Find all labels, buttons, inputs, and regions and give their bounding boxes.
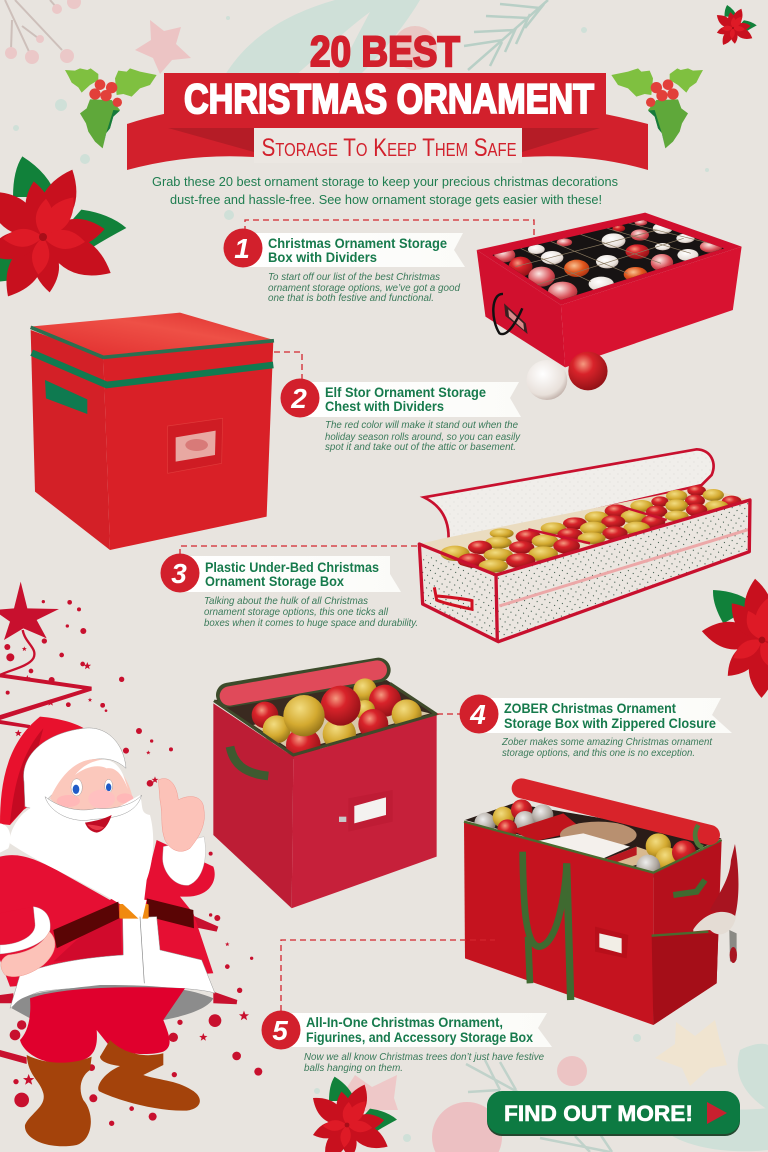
heading 1 bbox=[268, 236, 447, 265]
item 1 bbox=[224, 228, 465, 304]
button label: FIND OUT MORE! bbox=[504, 1101, 693, 1126]
right arm cuff and thumb-up hand bbox=[163, 837, 205, 885]
description 2 bbox=[325, 419, 521, 453]
description 1 bbox=[268, 271, 461, 304]
product: box with dividers bbox=[477, 213, 742, 400]
product: elf stor chest bbox=[30, 313, 274, 550]
product: all-in-one box bbox=[464, 788, 738, 1025]
heading 2: Chest with Dividers bbox=[325, 399, 444, 414]
rolled lid bbox=[228, 670, 378, 696]
belt bbox=[53, 902, 119, 948]
number badge 4: 4 bbox=[469, 699, 486, 730]
product: plastic under-bed box bbox=[419, 449, 750, 642]
poinsettia top right bbox=[717, 5, 757, 45]
beard bbox=[10, 795, 153, 922]
santa claus bbox=[0, 699, 262, 1146]
heading 5: Figurines, and Accessory Storage Box bbox=[306, 1030, 533, 1045]
title: christmas ornament: CHRISTMAS ORNAMENT bbox=[184, 75, 594, 122]
ribbon 2 bbox=[302, 382, 521, 417]
poinsettia right bbox=[687, 546, 768, 707]
title ribbon banner bbox=[127, 73, 648, 170]
heading 2: Elf Stor Ornament Storage bbox=[325, 385, 486, 400]
christmas tree star and swirl bbox=[0, 582, 124, 736]
ribbon 4 bbox=[481, 698, 732, 733]
description 3: boxes when it comes to huge space and durability. bbox=[204, 617, 418, 629]
heading 4: ZOBER Christmas Ornament bbox=[504, 701, 676, 716]
face bbox=[50, 759, 133, 815]
description 1: To start off our list of the best Christmas bbox=[268, 271, 441, 283]
description 3: ornament storage options, this one ticks all bbox=[204, 606, 389, 618]
description 5: balls hanging on them. bbox=[304, 1062, 403, 1074]
intro text: Grab these 20 best ornament storage to keep your precious christmas decorations bbox=[152, 174, 618, 189]
heading 3: Plastic Under-Bed Christmas bbox=[205, 560, 379, 575]
description 3: Talking about the hulk of all Christmas bbox=[204, 595, 369, 607]
number badge 5: 5 bbox=[272, 1015, 288, 1046]
description 2: spot it and take out of the attic or basement. bbox=[325, 441, 516, 453]
number badge 4 bbox=[460, 694, 498, 734]
description 1: ornament storage options, we’ve got a good bbox=[268, 282, 461, 294]
poinsettia bottom bbox=[313, 1077, 397, 1152]
description 3 bbox=[204, 595, 418, 629]
poinsettia top left bbox=[0, 156, 126, 296]
boots bbox=[25, 1055, 92, 1146]
item 4 bbox=[460, 694, 732, 759]
description 2: holiday season rolls around, so you can easily bbox=[325, 431, 521, 443]
left arm cuff and hand bbox=[0, 907, 50, 954]
number badge 3 bbox=[160, 554, 200, 592]
find out more button bbox=[487, 1091, 740, 1136]
holly left bbox=[65, 68, 157, 148]
intro text: dust-free and hassle-free. See how ornament storage gets easier with these! bbox=[170, 192, 602, 207]
coat bbox=[0, 840, 215, 987]
heading 3: Ornament Storage Box bbox=[205, 574, 344, 589]
ribbon 1 bbox=[245, 233, 465, 267]
title: 20 best: 20 BEST bbox=[310, 28, 460, 76]
holly right bbox=[611, 68, 703, 148]
ribbon 5 bbox=[283, 1013, 552, 1047]
play arrow icon bbox=[707, 1102, 727, 1124]
gnome bbox=[693, 844, 738, 963]
pants bbox=[20, 987, 185, 1063]
heading 5: All-In-One Christmas Ornament, bbox=[306, 1015, 503, 1030]
description 5: Now we all know Christmas trees don’t just have festive bbox=[304, 1051, 544, 1063]
number badge 5 bbox=[262, 1010, 300, 1050]
item 5 bbox=[262, 1010, 552, 1074]
loose ornaments bbox=[527, 352, 608, 400]
ribbon 3 bbox=[182, 556, 401, 592]
number badge 3: 3 bbox=[171, 558, 187, 589]
number badge 2 bbox=[280, 378, 320, 418]
background decorations top bbox=[5, 0, 709, 220]
heading 5 bbox=[306, 1015, 533, 1045]
rolled lid bbox=[522, 788, 710, 847]
number badge 1: 1 bbox=[234, 233, 250, 264]
connector lines bbox=[180, 220, 534, 1011]
item 3 bbox=[160, 554, 418, 629]
background decorations bottom bbox=[314, 1020, 768, 1152]
heading 4: Storage Box with Zippered Closure bbox=[504, 716, 716, 731]
hat fur bbox=[24, 728, 126, 810]
straps bbox=[523, 852, 571, 1000]
product: zober box bbox=[213, 670, 437, 908]
heading 1: Christmas Ornament Storage bbox=[268, 236, 447, 251]
item 2 bbox=[280, 378, 521, 453]
description 4: Zober makes some amazing Christmas ornament bbox=[501, 736, 713, 748]
heading 4 bbox=[504, 701, 716, 731]
description 1: one that is both festive and functional. bbox=[268, 292, 434, 304]
heading 1: Box with Dividers bbox=[268, 250, 377, 265]
coat front and hem bbox=[10, 917, 215, 1008]
heading 2 bbox=[325, 385, 486, 414]
number badge 1 bbox=[224, 228, 262, 268]
description 4: storage options, and this one is no exception. bbox=[502, 747, 695, 759]
intro text bbox=[152, 174, 618, 207]
description 2: The red color will make it stand out when the bbox=[325, 419, 518, 431]
number badge 2: 2 bbox=[290, 383, 307, 414]
subtitle box bbox=[254, 128, 522, 163]
hat bbox=[0, 717, 87, 825]
description 4 bbox=[501, 736, 713, 759]
heading 3 bbox=[205, 560, 379, 589]
subtitle: Storage To Keep Them Safe bbox=[262, 134, 516, 162]
description 5 bbox=[304, 1051, 544, 1074]
